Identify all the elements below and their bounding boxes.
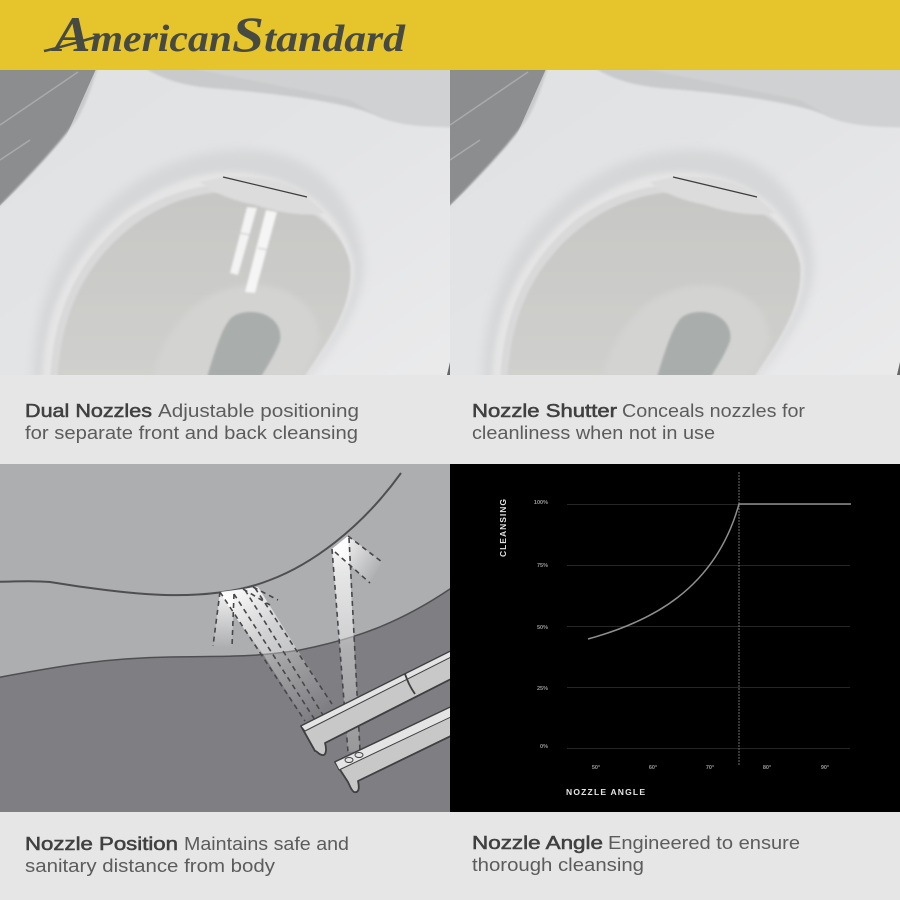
caption: Nozzle Angle: Engineered to ensure — [608, 832, 800, 853]
caption: Nozzle Shutter: Nozzle Shutter — [472, 400, 617, 421]
y axis ticks — [534, 500, 548, 750]
panel: nozzle angle chart — [450, 464, 900, 812]
caption: Nozzle Angle: Nozzle Angle — [472, 832, 603, 853]
caption: Nozzle Position: sanitary distance from body — [25, 855, 276, 876]
caption: Nozzle Shutter — [472, 400, 805, 443]
x axis ticks: 80° — [763, 765, 771, 771]
caption: Nozzle Angle — [472, 832, 800, 875]
y axis ticks: 0% — [540, 744, 548, 750]
caption: Nozzle Shutter: cleanliness when not in use — [472, 422, 715, 443]
front nozzle spray — [213, 587, 332, 721]
y axis title: CLEANSING — [498, 499, 508, 557]
caption: Nozzle Position: Nozzle Position — [25, 833, 178, 854]
y axis ticks: 50% — [537, 625, 548, 631]
caption: Nozzle Shutter: Conceals nozzles for — [622, 400, 805, 421]
caption: Dual Nozzles: Dual Nozzles — [25, 400, 152, 421]
rear nozzle — [335, 705, 455, 792]
body contour line — [0, 473, 401, 595]
caption panel top — [0, 375, 900, 464]
lower dark area — [0, 588, 450, 812]
logo: American Standard — [44, 6, 406, 62]
caption: Dual Nozzles: for separate front and back cleansing — [25, 422, 358, 443]
caption: Nozzle Position: Maintains safe and — [184, 833, 349, 854]
x axis ticks — [592, 765, 829, 771]
photo: dual nozzles — [0, 70, 450, 375]
caption: Dual Nozzles: Adjustable positioning — [158, 400, 359, 421]
cleansing curve — [588, 504, 851, 639]
rear nozzle spray — [332, 536, 382, 752]
logo: American Standard: American — [51, 6, 232, 62]
caption: Nozzle Position — [25, 833, 349, 876]
grid lines — [567, 504, 850, 748]
header band — [0, 0, 900, 70]
caption: Nozzle Angle: thorough cleansing — [472, 854, 644, 875]
x axis title: NOZZLE ANGLE — [566, 787, 645, 797]
y axis ticks: 75% — [537, 563, 548, 569]
x axis ticks: 90° — [821, 765, 829, 771]
y axis ticks: 25% — [537, 686, 548, 692]
caption: Dual Nozzles — [25, 400, 359, 443]
x axis ticks: 60° — [649, 765, 657, 771]
panel: nozzle position diagram — [0, 464, 460, 830]
y axis ticks: 100% — [534, 500, 548, 506]
photo: nozzle shutter closed — [450, 70, 900, 375]
icon: two nozzles — [230, 207, 277, 293]
x axis ticks: 50° — [592, 765, 600, 771]
x axis ticks: 70° — [706, 765, 714, 771]
logo: American Standard: Standard — [232, 6, 406, 62]
threshold line — [738, 472, 740, 766]
front nozzle — [301, 649, 455, 755]
caption panel bottom — [0, 812, 900, 900]
